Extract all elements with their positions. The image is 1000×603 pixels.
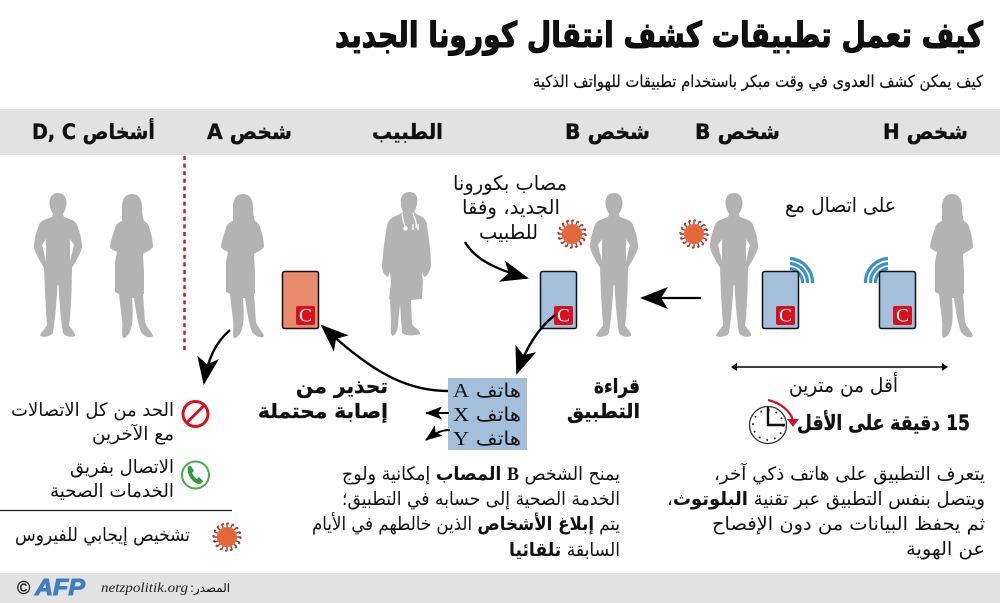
recommendation: limit all contact: الحد من كل الاتصالات xyxy=(11,400,174,421)
header band: person labels: شخص H xyxy=(883,120,968,144)
text: how the app works: عن الهوية xyxy=(906,539,985,560)
label: infected according to doctor: للطبيب xyxy=(479,220,538,244)
silhouette: person D xyxy=(34,193,82,337)
arrow: person B to infected person B xyxy=(642,297,701,299)
arrow: person A to recommendations xyxy=(204,330,230,383)
silhouette: person B infected xyxy=(590,193,638,337)
recommendation: contact health services: الخدمات الصحية xyxy=(50,481,174,502)
app readout box xyxy=(448,378,527,450)
silhouette: person B before xyxy=(710,193,758,337)
phone: person H with bluetooth waves xyxy=(865,258,916,328)
header band: person labels: أشخاص D, C xyxy=(32,117,155,144)
distance arrow xyxy=(731,363,948,371)
label: infected according to doctor: مصاب بكورونا xyxy=(453,171,567,195)
header band: person labels: شخص B xyxy=(565,120,650,144)
silhouette: person H xyxy=(930,194,973,338)
text: what infected person B does xyxy=(312,464,620,561)
label: infected according to doctor: الجديد، وفقا xyxy=(462,195,560,219)
arrow: phone to app readout xyxy=(517,315,555,373)
phone: person A, orange xyxy=(282,272,318,328)
label: in contact with: على اتصال مع xyxy=(785,193,896,217)
label: reading the app: التطبيق xyxy=(567,399,640,423)
app readout box: هاتف A xyxy=(453,380,521,402)
silhouette: doctor xyxy=(382,192,431,336)
text: what infected person B does: يمنح الشخص B المصاب إمكانية ولوج xyxy=(342,464,620,485)
text: what infected person B does: الخدمة الصحية إلى حسابه في التطبيق؛ xyxy=(342,489,620,510)
app readout box: هاتف Y xyxy=(453,428,521,450)
header band: person labels: الطبيب xyxy=(372,120,443,144)
header band: person labels xyxy=(0,109,1000,155)
text: what infected person B does: يتم إبلاغ الأشخاص الذين خالطهم في الأيام xyxy=(312,512,620,535)
legend: positive virus diagnosis: تشخيص إيجابي للفيروس xyxy=(15,525,190,546)
text: how the app works: ثم يحفظ البيانات من دون الإفصاح xyxy=(712,514,985,535)
recommendation: contact health services xyxy=(50,457,209,502)
text: how the app works: ويتصل بنفس التطبيق عبر تقنية البلوتوث، xyxy=(667,489,985,510)
phone: infected person B xyxy=(540,272,576,328)
silhouette: person C xyxy=(110,194,153,338)
label: possible infection warning xyxy=(258,374,388,423)
text: what infected person B does: السابقة تلقائيا xyxy=(509,540,620,561)
footer: source and credit: المصدر: xyxy=(190,581,230,596)
icon: virus beside infected person B xyxy=(558,220,586,248)
separator: red dotted line xyxy=(183,156,186,350)
text: how the app works xyxy=(667,462,985,560)
icon: clock xyxy=(750,400,799,444)
arrow: phone Y row xyxy=(426,430,450,440)
recommendation: limit all contact: مع الآخرين xyxy=(92,423,174,445)
label: possible infection warning: إصابة محتملة xyxy=(258,399,388,423)
recommendation: limit all contact xyxy=(11,400,208,445)
label: possible infection warning: تحذير من xyxy=(296,374,388,398)
header band: person labels: شخص B xyxy=(695,120,780,144)
label: infected according to doctor xyxy=(453,171,567,244)
header band: person labels: شخص A xyxy=(207,120,292,144)
recommendation: contact health services: الاتصال بفريق xyxy=(70,457,174,478)
label: less than two metres: أقل من مترين xyxy=(789,372,898,397)
silhouette: person A xyxy=(221,194,264,338)
label: reading the app: قراءة xyxy=(594,374,640,398)
text: how the app works: يتعرف التطبيق على هاتف ذكي آخر، xyxy=(714,462,985,485)
footer: source and credit: netzpolitik.org xyxy=(101,581,188,596)
footer: source and credit xyxy=(0,573,1000,603)
app readout box: هاتف X xyxy=(453,404,521,426)
arrow: doctor diagnosis to phone xyxy=(465,242,527,278)
label: at least 15 minutes: 15 دقيقة على الأقل xyxy=(797,409,970,435)
legend: positive virus diagnosis xyxy=(15,523,241,551)
footer: source and credit: © xyxy=(17,578,30,598)
arrow: phone X row xyxy=(426,412,449,414)
phone: person B with bluetooth waves xyxy=(762,258,813,328)
icon: virus beside person B xyxy=(680,220,708,248)
arrow: phone A row to person A phone xyxy=(322,326,448,391)
label: reading the app xyxy=(567,374,640,423)
footer: source and credit: AFP xyxy=(34,574,86,600)
